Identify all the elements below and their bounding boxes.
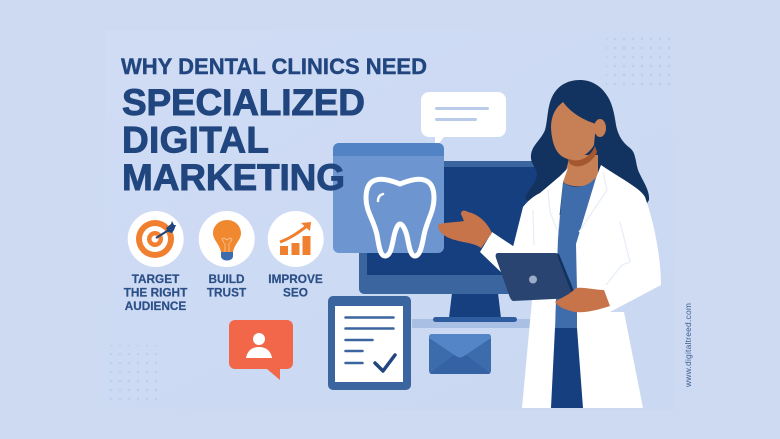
clipboard document <box>328 296 411 390</box>
hair <box>525 80 649 215</box>
sleeve cuff <box>480 232 520 276</box>
neck <box>563 155 598 186</box>
monitor stand <box>449 293 501 318</box>
label <box>124 272 188 313</box>
icon: target <box>128 211 184 267</box>
icon: light bulb <box>199 211 255 267</box>
coat folds <box>533 172 630 285</box>
icon: tooth <box>366 179 434 256</box>
neck shadow <box>567 146 597 166</box>
desk shadow <box>412 319 534 328</box>
dot pattern: top right <box>606 32 674 90</box>
label: TRUST <box>207 286 247 300</box>
doctor <box>438 80 661 408</box>
icon: envelope <box>429 334 491 374</box>
icon: profile chat bubble <box>229 320 293 380</box>
title <box>121 54 427 198</box>
website url: www.digitaltreed.com <box>683 303 693 388</box>
lab coat <box>513 165 661 408</box>
label: THE RIGHT <box>124 286 188 300</box>
left hand <box>438 211 492 248</box>
right hand <box>555 288 610 312</box>
label: TARGET <box>132 272 180 286</box>
title line: marketing: MARKETING <box>122 157 345 198</box>
icon: check mark <box>375 355 395 371</box>
benefit: improve seo <box>268 211 324 300</box>
speech bubble <box>421 92 506 148</box>
shirt <box>555 177 596 328</box>
monitor <box>359 161 549 322</box>
tablet <box>496 253 576 301</box>
dental card <box>333 143 444 256</box>
face <box>551 102 596 159</box>
label: AUDIENCE <box>125 299 186 313</box>
title line: kicker: WHY DENTAL CLINICS NEED <box>121 54 427 79</box>
title line: digital: DIGITAL <box>122 120 269 160</box>
label: IMPROVE <box>268 272 323 286</box>
inner panel <box>105 30 675 410</box>
label <box>207 272 247 300</box>
label <box>268 272 323 300</box>
lower scrubs <box>551 328 583 408</box>
ear <box>594 119 606 137</box>
dot pattern: bottom left <box>108 345 163 401</box>
benefit: build trust <box>199 211 255 300</box>
title line: specialized: SPECIALIZED <box>122 82 365 123</box>
label: BUILD <box>208 272 245 286</box>
monitor body <box>359 161 549 294</box>
label: SEO <box>283 286 308 300</box>
benefit: target the right audience <box>124 211 188 313</box>
icon: growth chart <box>268 211 324 267</box>
